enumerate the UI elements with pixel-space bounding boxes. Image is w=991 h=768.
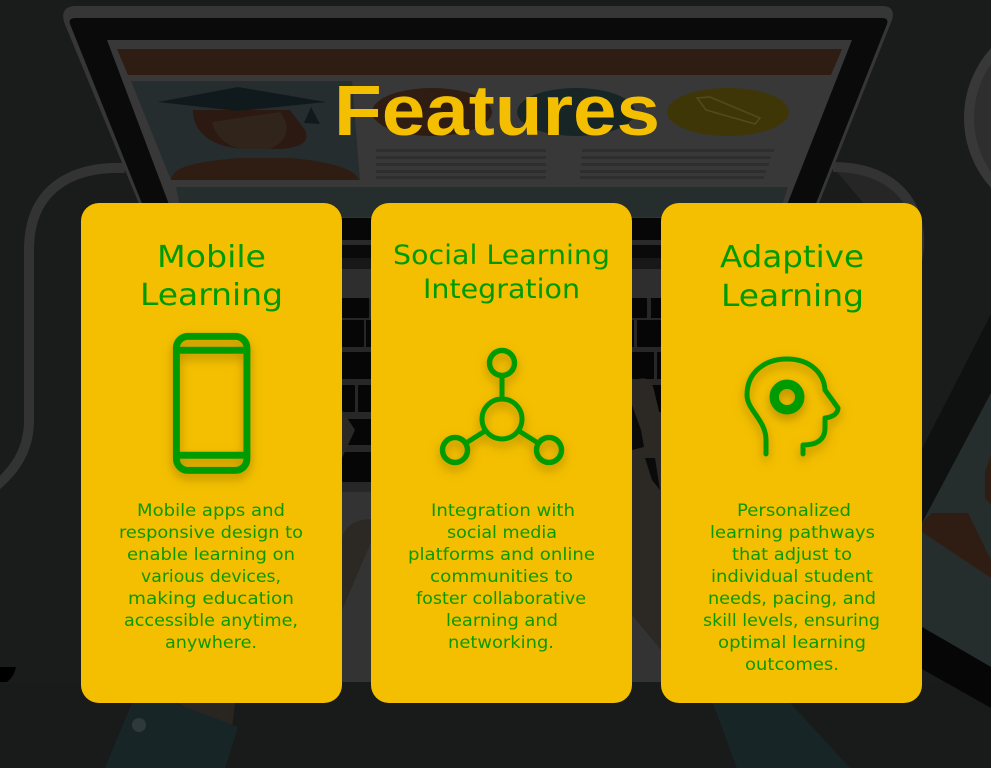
text: social learning description: social media — [447, 523, 557, 543]
heading: mobile learning — [140, 240, 283, 313]
sleeve left — [105, 703, 238, 768]
screen — [107, 40, 852, 215]
ring top right — [969, 19, 991, 217]
laptop bottom — [0, 682, 991, 768]
brown ellipse behind title — [372, 88, 492, 136]
text: mobile learning description: various devices, — [141, 567, 281, 587]
heading: adaptive learning: Adaptive — [720, 240, 864, 275]
text: adaptive learning description: outcomes. — [745, 655, 839, 675]
text: adaptive learning description: learning pathways — [710, 523, 875, 543]
finger left — [342, 410, 355, 458]
keyboard keys — [180, 298, 820, 492]
graduate — [158, 87, 359, 180]
spot bottom left — [0, 667, 16, 685]
text: mobile learning description: anywhere. — [165, 633, 257, 653]
text: social learning description: foster collaborative — [416, 589, 586, 609]
heading: mobile learning: Mobile — [157, 240, 266, 275]
heading: adaptive learning: Learning — [721, 279, 864, 314]
text lines on screen — [376, 149, 774, 179]
heading: social learning integration: Integration — [423, 274, 580, 305]
laptop frame outer — [63, 6, 893, 216]
teal strip — [176, 187, 788, 217]
hand right — [632, 378, 661, 650]
text: social learning description: networking. — [448, 633, 554, 653]
heading: mobile learning: Learning — [140, 278, 283, 313]
text: adaptive learning description — [703, 501, 880, 675]
text: mobile learning description: making education — [128, 589, 294, 609]
keyboard top — [180, 218, 820, 298]
heading: social learning integration — [393, 240, 610, 305]
text: mobile learning description: accessible anytime, — [124, 611, 298, 631]
yellow ellipse with pencil — [667, 88, 789, 136]
tablet right — [922, 314, 991, 708]
panel: mobile learning — [81, 203, 342, 703]
photo panel — [131, 81, 360, 180]
heading: social learning integration: Social Learning — [393, 240, 610, 271]
text: adaptive learning description: that adjust to — [732, 545, 852, 565]
text: adaptive learning description: Personalized — [737, 501, 851, 521]
text: mobile learning description: enable learning on — [127, 545, 295, 565]
text: adaptive learning description: optimal learning — [718, 633, 866, 653]
text: mobile learning description: responsive design to — [119, 523, 303, 543]
panel: adaptive learning — [661, 203, 922, 703]
title: Features — [334, 72, 660, 151]
icon: phone — [176, 336, 247, 470]
brown bar — [117, 49, 842, 75]
text: social learning description: Integration with — [431, 501, 575, 521]
laptop base — [160, 215, 830, 682]
text: mobile learning description: Mobile apps and — [137, 501, 285, 521]
text: adaptive learning description: needs, pacing, and — [708, 589, 876, 609]
text: social learning description: learning and — [446, 611, 558, 631]
teal ellipse behind title — [517, 88, 635, 136]
text: mobile learning description — [119, 501, 303, 653]
sleeve right — [713, 703, 850, 768]
panel: social learning integration — [371, 203, 632, 703]
text: social learning description: platforms and online — [408, 545, 595, 565]
hand left — [342, 519, 372, 610]
text: adaptive learning description: individual student — [711, 567, 873, 587]
text: social learning description: communities to — [430, 567, 573, 587]
finger shadows — [632, 405, 660, 490]
cable right — [833, 167, 919, 265]
text: adaptive learning description: skill levels, ensuring — [703, 611, 880, 631]
cable left — [0, 168, 125, 487]
icon: network — [442, 350, 562, 462]
laptop bezel — [70, 18, 887, 216]
icon: head with target — [747, 359, 838, 454]
text: social learning description — [408, 501, 595, 653]
heading: adaptive learning — [720, 240, 864, 314]
